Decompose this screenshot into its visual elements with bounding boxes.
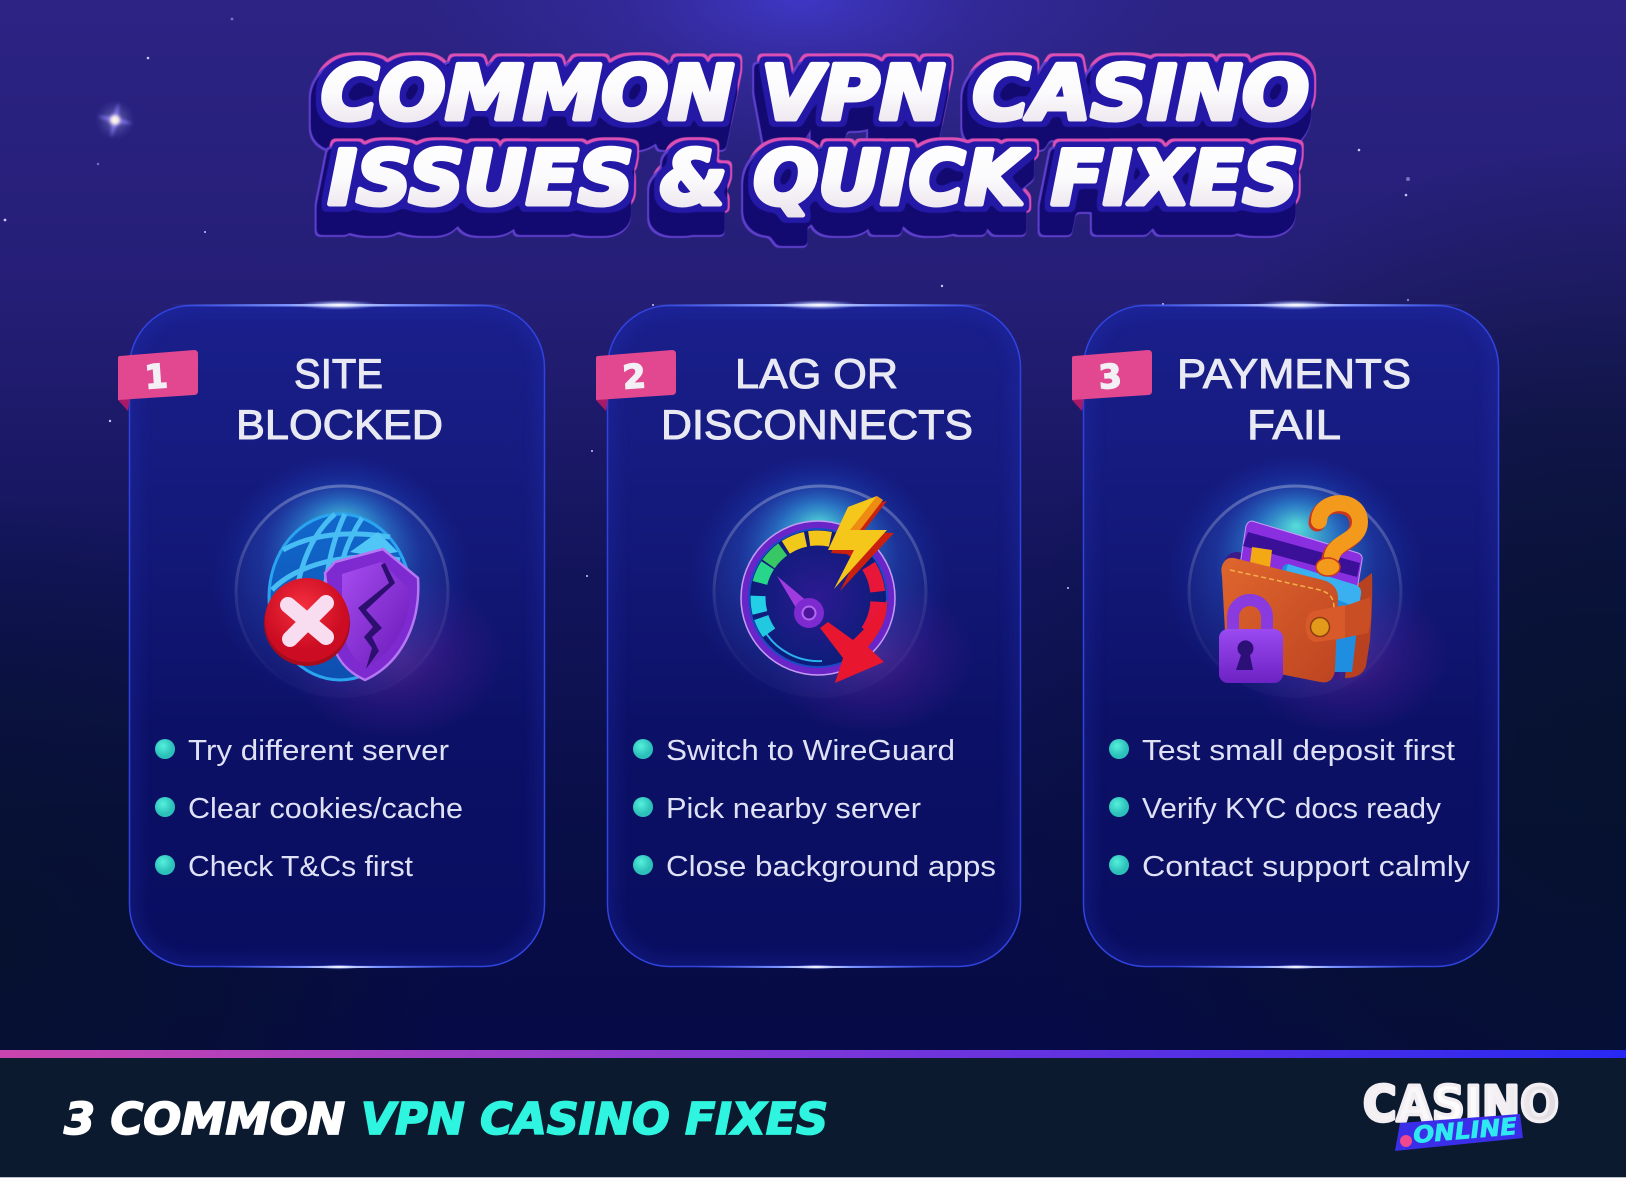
star field [4,18,1410,589]
badge 1: 1 [143,356,169,397]
panel: payments fail [1072,300,1499,970]
icon: sparkle star [94,99,136,141]
bullet list: Close background apps [666,851,996,883]
footer tagline: VPN CASINO FIXES [361,1094,828,1145]
logo: CASINO [1363,1076,1559,1133]
bullet list: Clear cookies/cache [188,793,463,825]
heading: lag or disconnects [661,350,973,448]
bullet list [1109,735,1471,883]
heading: lag or disconnects: LAG OR [735,350,898,397]
badge 2 [596,350,676,411]
heading: payments fail: PAYMENTS [1177,350,1411,397]
bullet list: Test small deposit first [1142,735,1455,767]
footer tagline [64,1094,828,1145]
heading: payments fail: FAIL [1247,401,1341,448]
bullet list: Verify KYC docs ready [1142,793,1442,825]
badge 3 [1072,350,1152,411]
panel: lag or disconnects [596,300,1021,970]
heading: site blocked [236,350,443,448]
bullet list: Switch to WireGuard [666,735,955,767]
bullet list: Check T&Cs first [188,851,413,883]
heading: site blocked: BLOCKED [236,401,443,448]
heading: payments fail [1177,350,1411,448]
badge 3: 3 [1097,356,1123,397]
footer band [0,1058,1626,1178]
heading: site blocked: SITE [294,350,383,397]
badge 2: 2 [621,356,647,397]
gradient divider bar [0,1050,1626,1058]
badge 1 [118,350,198,411]
title: ISSUES & QUICK FIXES [328,134,1298,222]
icon: wallet with lock and question mark [1166,455,1450,735]
bullet list: Pick nearby server [666,793,921,825]
icon: speed gauge with lightning bolt [689,455,975,735]
bullet list [155,735,463,883]
icon: globe, broken shield and red X [212,455,505,740]
footer tagline: 3 COMMON [64,1094,345,1145]
title [321,49,1309,222]
panel: site blocked [118,300,545,970]
title: COMMON VPN CASINO [321,49,1309,137]
heading: lag or disconnects: DISCONNECTS [661,401,973,448]
bullet list [633,735,996,883]
bullet list: Contact support calmly [1142,851,1471,883]
bullet list: Try different server [188,735,449,767]
logo: ONLINE [1412,1114,1518,1149]
